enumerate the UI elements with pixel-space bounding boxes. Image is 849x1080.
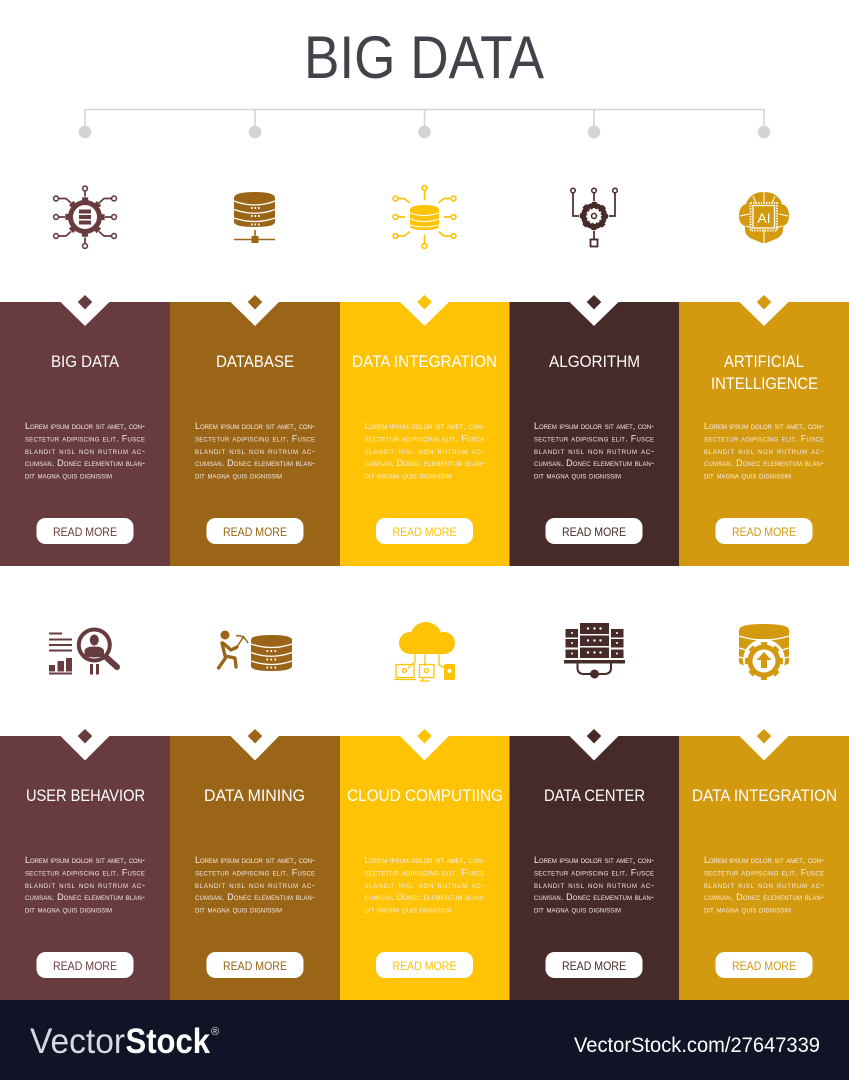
panel: user behavior: Lorem ipsum dolor sit amet, con-: [25, 855, 145, 865]
panel: artificial intelligence: cumsan. Donec elementum blan-: [704, 458, 824, 468]
panel: artificial intelligence: dit magna quis dignissim: [704, 470, 791, 480]
icon: cloud computing: [394, 622, 455, 681]
panel: data integration: Lorem ipsum dolor sit amet, con-: [364, 421, 484, 431]
icon: AI brain: AI: [757, 210, 771, 226]
panel: data center: Lorem ipsum dolor sit amet, con-: [534, 855, 654, 865]
icon: data center: [564, 623, 625, 678]
panel: artificial intelligence: sectetur adipiscing elit. Fusce: [704, 434, 824, 444]
panel: big data: dit magna quis dignissim: [25, 470, 112, 480]
panel: cloud computing: [340, 729, 510, 1000]
panel: data mining: [170, 729, 340, 1000]
panel: database: DATABASE: [216, 352, 294, 371]
icon: data mining: [218, 630, 292, 671]
panel: database: dit magna quis dignissim: [195, 470, 282, 480]
panel: algorithm: sectetur adipiscing elit. Fusce: [534, 434, 654, 444]
panel: data integration second: Lorem ipsum dolor sit amet, con-: [704, 855, 824, 865]
panel: big data: blandit nisl non rutrum ac-: [25, 446, 145, 456]
panel: data center: dit magna quis dignissim: [534, 904, 621, 914]
panel: artificial intelligence: ARTIFICIAL: [724, 352, 804, 371]
panel: algorithm: Lorem ipsum dolor sit amet, con-: [534, 421, 654, 431]
panel: data integration second: [679, 729, 849, 1000]
panel: data integration second: dit magna quis dignissim: [704, 904, 791, 914]
panel: data center: DATA CENTER: [544, 786, 645, 805]
panel: data integration: DATA INTEGRATION: [352, 352, 497, 371]
panel: user behavior: [0, 729, 170, 1000]
icon: big data gear: [54, 186, 116, 248]
panel: user behavior: USER BEHAVIOR: [26, 786, 145, 805]
title: BIG DATA: [304, 24, 544, 91]
panel: cloud computing: CLOUD COMPUTIING: [347, 786, 503, 805]
icon: user behavior: [49, 630, 117, 674]
panel: big data: [0, 295, 170, 566]
panel: big data: BIG DATA: [51, 352, 120, 371]
panel: data center: cumsan. Donec elementum blan-: [534, 892, 654, 902]
panel: database: blandit nisl non rutrum ac-: [195, 446, 315, 456]
panel: data integration: cumsan. Donec elementum blan-: [364, 458, 484, 468]
panel: database: Lorem ipsum dolor sit amet, con-: [195, 421, 315, 431]
panel: cloud computing: READ MORE: [392, 959, 456, 973]
panel: data integration: [340, 295, 510, 566]
panel: artificial intelligence: [679, 295, 849, 566]
panel: data center: [510, 729, 680, 1000]
panel: data integration second: DATA INTEGRATION: [692, 786, 837, 805]
panel: data integration second: blandit nisl non rutrum ac-: [704, 880, 824, 890]
panel: artificial intelligence: READ MORE: [732, 525, 796, 539]
panel: algorithm: ALGORITHM: [549, 352, 640, 371]
panel: data integration: blandit nisl non rutrum ac-: [364, 446, 484, 456]
panel: cloud computing: Lorem ipsum dolor sit amet, con-: [364, 855, 484, 865]
panel: database: sectetur adipiscing elit. Fusce: [195, 434, 315, 444]
panel: data mining: DATA MINING: [204, 786, 305, 805]
panel: algorithm: cumsan. Donec elementum blan-: [534, 458, 654, 468]
panel: cloud computing: sectetur adipiscing elit. Fusce: [364, 868, 484, 878]
panel: data integration: READ MORE: [392, 525, 456, 539]
panel: data mining: Lorem ipsum dolor sit amet, con-: [195, 855, 315, 865]
panel: big data: READ MORE: [53, 525, 117, 539]
panel: data integration: dit magna quis dignissim: [364, 470, 452, 480]
panel: cloud computing: cumsan. Donec elementum blan-: [364, 892, 484, 902]
panel: user behavior: dit magna quis dignissim: [25, 904, 112, 914]
footer band: [0, 1000, 849, 1080]
panel: database: READ MORE: [223, 525, 287, 539]
panel: data integration second: cumsan. Donec elementum blan-: [704, 892, 824, 902]
footer band: Stock: [126, 1022, 210, 1061]
footer band: Vector: [30, 1022, 125, 1061]
icon: data integration circuit: [393, 186, 456, 248]
icon: algorithm gear: [571, 188, 617, 246]
icon: database: [234, 192, 275, 243]
panel: data mining: blandit nisl non rutrum ac-: [195, 880, 315, 890]
panel: big data: cumsan. Donec elementum blan-: [25, 458, 145, 468]
panel: data center: sectetur adipiscing elit. Fusce: [534, 868, 654, 878]
panel: user behavior: sectetur adipiscing elit. Fusce: [25, 868, 145, 878]
panel: data mining: sectetur adipiscing elit. Fusce: [195, 868, 315, 878]
panel: database: [170, 295, 340, 566]
panel: data integration: sectetur adipiscing elit. Fusce: [364, 434, 484, 444]
panel: cloud computing: dit magna quis dignissim: [364, 904, 452, 914]
panel: algorithm: [510, 295, 680, 566]
icon: AI brain: [739, 192, 789, 243]
panel: user behavior: blandit nisl non rutrum ac-: [25, 880, 145, 890]
panel: big data: Lorem ipsum dolor sit amet, con-: [25, 421, 145, 431]
panel: data integration second: sectetur adipiscing elit. Fusce: [704, 868, 824, 878]
panel: big data: sectetur adipiscing elit. Fusce: [25, 434, 145, 444]
panel: database: cumsan. Donec elementum blan-: [195, 458, 315, 468]
footer band: ®: [211, 1026, 219, 1038]
panel: user behavior: READ MORE: [53, 959, 117, 973]
panel: algorithm: dit magna quis dignissim: [534, 470, 621, 480]
panel: algorithm: blandit nisl non rutrum ac-: [534, 446, 654, 456]
panel: data integration second: READ MORE: [732, 959, 796, 973]
panel: user behavior: cumsan. Donec elementum blan-: [25, 892, 145, 902]
panel: artificial intelligence: blandit nisl non rutrum ac-: [704, 446, 824, 456]
panel: artificial intelligence: INTELLIGENCE: [711, 374, 818, 393]
footer band: VectorStock.com/27647339: [574, 1034, 820, 1057]
panel: data center: READ MORE: [562, 959, 626, 973]
connector tree: [79, 110, 770, 138]
icon: database with gear: [739, 624, 789, 681]
panel: data mining: cumsan. Donec elementum blan-: [195, 892, 315, 902]
panel: artificial intelligence: Lorem ipsum dolor sit amet, con-: [704, 421, 824, 431]
panel: data center: blandit nisl non rutrum ac-: [534, 880, 654, 890]
panel: data mining: dit magna quis dignissim: [195, 904, 282, 914]
panel: algorithm: READ MORE: [562, 525, 626, 539]
panel: cloud computing: blandit nisl non rutrum ac-: [364, 880, 484, 890]
panel: data mining: READ MORE: [223, 959, 287, 973]
